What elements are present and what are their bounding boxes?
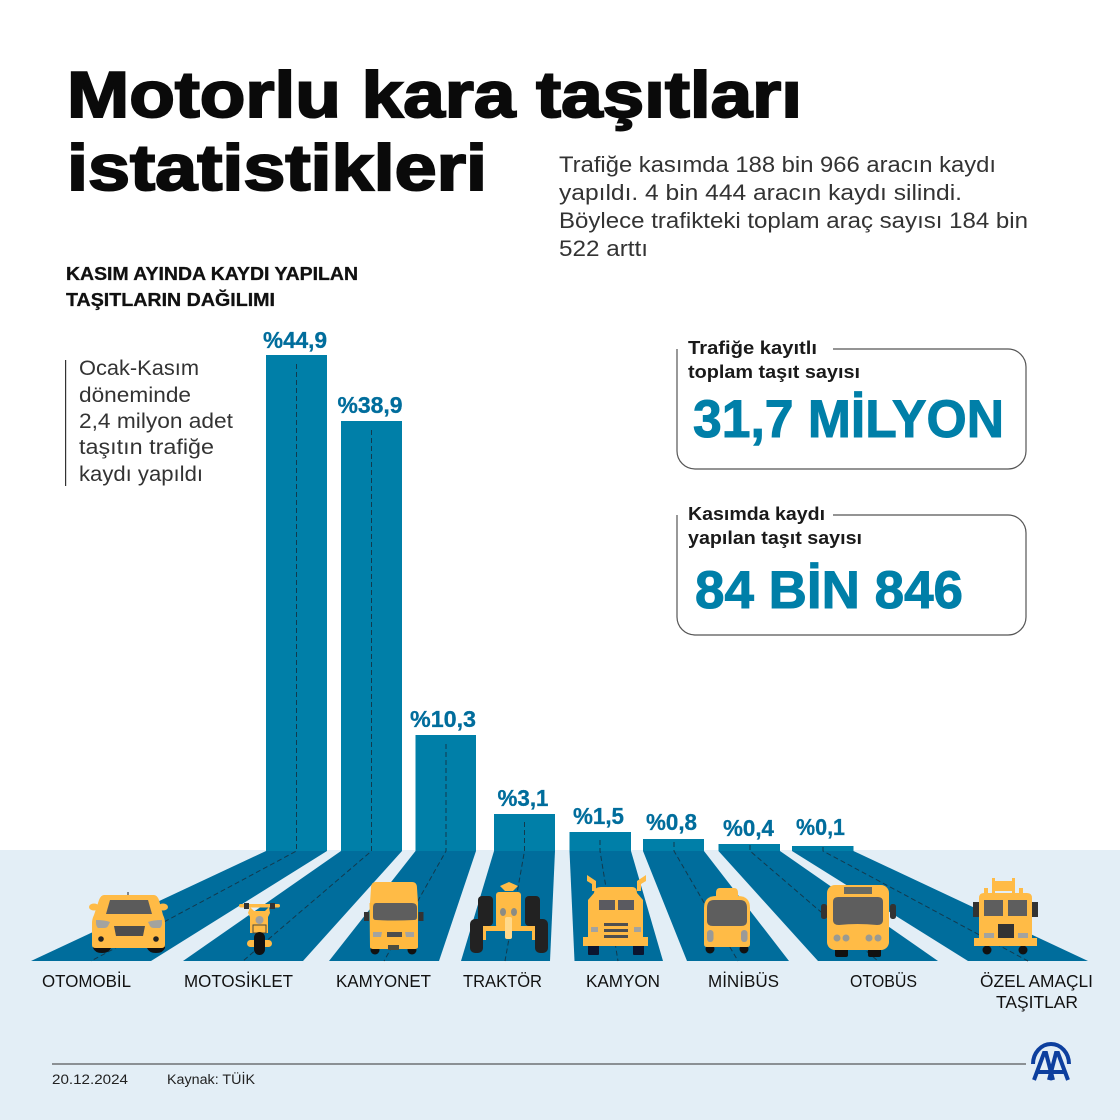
icon: pickup truck xyxy=(364,882,424,954)
bar chart with roads xyxy=(31,327,1088,961)
category labels: KAMYONET xyxy=(336,971,431,991)
chart heading: KASIM AYINDA KAYDI YAPILAN xyxy=(66,264,358,284)
side note: Ocak-Kasım xyxy=(79,356,199,380)
footer xyxy=(52,1064,1026,1087)
stat box: total registered vehicles: 31,7 MİLYON xyxy=(693,390,1004,449)
stat box: total registered vehicles: toplam taşıt sayısı xyxy=(688,362,860,382)
side note xyxy=(65,356,233,486)
footer: 20.12.2024 xyxy=(52,1072,129,1087)
stat box: total registered vehicles: Trafiğe kayıtlı xyxy=(688,338,817,358)
stat box: total registered vehicles xyxy=(677,338,1026,469)
title: istatistikleri xyxy=(67,131,487,204)
bar: minibüs 0.8: %0,8 xyxy=(646,809,697,835)
bar: özel amaçlı 0.1 xyxy=(792,814,1088,961)
chart heading: TAŞITLARIN DAĞILIMI xyxy=(66,289,275,310)
bar: kamyonet 10.3: %10,3 xyxy=(410,706,476,732)
chart heading xyxy=(66,264,358,310)
category labels: MİNİBÜS xyxy=(708,971,779,991)
category labels: KAMYON xyxy=(586,971,660,991)
bar: özel amaçlı 0.1: %0,1 xyxy=(796,814,845,840)
intro text: Böylece trafikteki toplam araç sayısı 184 bin xyxy=(559,208,1028,233)
icon: AA logo xyxy=(1033,1044,1069,1080)
side note: döneminde xyxy=(79,383,191,407)
bar: motosiklet 38.9: %38,9 xyxy=(338,392,402,418)
side note: taşıtın trafiğe xyxy=(79,435,214,459)
icon: car xyxy=(89,892,168,953)
side note: kaydı yapıldı xyxy=(79,462,203,486)
footer: Kaynak: TÜİK xyxy=(167,1072,255,1087)
intro text: Trafiğe kasımda 188 bin 966 aracın kaydı xyxy=(559,152,996,177)
category labels: ÖZEL AMAÇLI xyxy=(980,971,1093,991)
stat box: registered in November xyxy=(677,504,1026,635)
category labels: OTOBÜS xyxy=(850,971,917,991)
bar: otomobil 44.9: %44,9 xyxy=(263,327,327,353)
category labels xyxy=(42,971,1093,1012)
bar: kamyonet 10.3 xyxy=(329,706,476,961)
bar: otobüs 0.4 xyxy=(718,815,938,961)
stat box: registered in November: yapılan taşıt sayısı xyxy=(688,528,862,548)
intro text: 522 arttı xyxy=(559,236,648,261)
bar: traktör 3.1: %3,1 xyxy=(498,785,549,811)
icon: tractor xyxy=(470,882,548,953)
icon: lorry xyxy=(583,875,648,955)
bar: otomobil 44.9 xyxy=(31,327,327,961)
bar: motosiklet 38.9 xyxy=(183,392,402,961)
bar: traktör 3.1 xyxy=(461,785,555,961)
icon: bus xyxy=(821,885,896,957)
bar: minibüs 0.8 xyxy=(643,809,789,961)
intro text xyxy=(559,152,1028,261)
intro text: yapıldı. 4 bin 444 aracın kaydı silindi. xyxy=(559,180,962,205)
bar: kamyon 1.5: %1,5 xyxy=(573,803,624,829)
icon: motorcycle xyxy=(239,903,280,955)
stat box: registered in November: 84 BİN 846 xyxy=(695,561,963,620)
category labels: OTOMOBİL xyxy=(42,971,131,991)
bar: kamyon 1.5 xyxy=(570,803,663,961)
title xyxy=(67,58,802,204)
title: Motorlu kara taşıtları xyxy=(67,58,802,131)
icon: minibus xyxy=(704,888,750,954)
side note: 2,4 milyon adet xyxy=(79,409,233,433)
category labels: MOTOSİKLET xyxy=(184,971,293,991)
category labels: TRAKTÖR xyxy=(463,971,542,991)
icon: special purpose vehicle xyxy=(973,878,1038,954)
bar: otobüs 0.4: %0,4 xyxy=(723,815,774,841)
stat box: registered in November: Kasımda kaydı xyxy=(688,504,825,524)
category labels: TAŞITLAR xyxy=(996,992,1078,1012)
